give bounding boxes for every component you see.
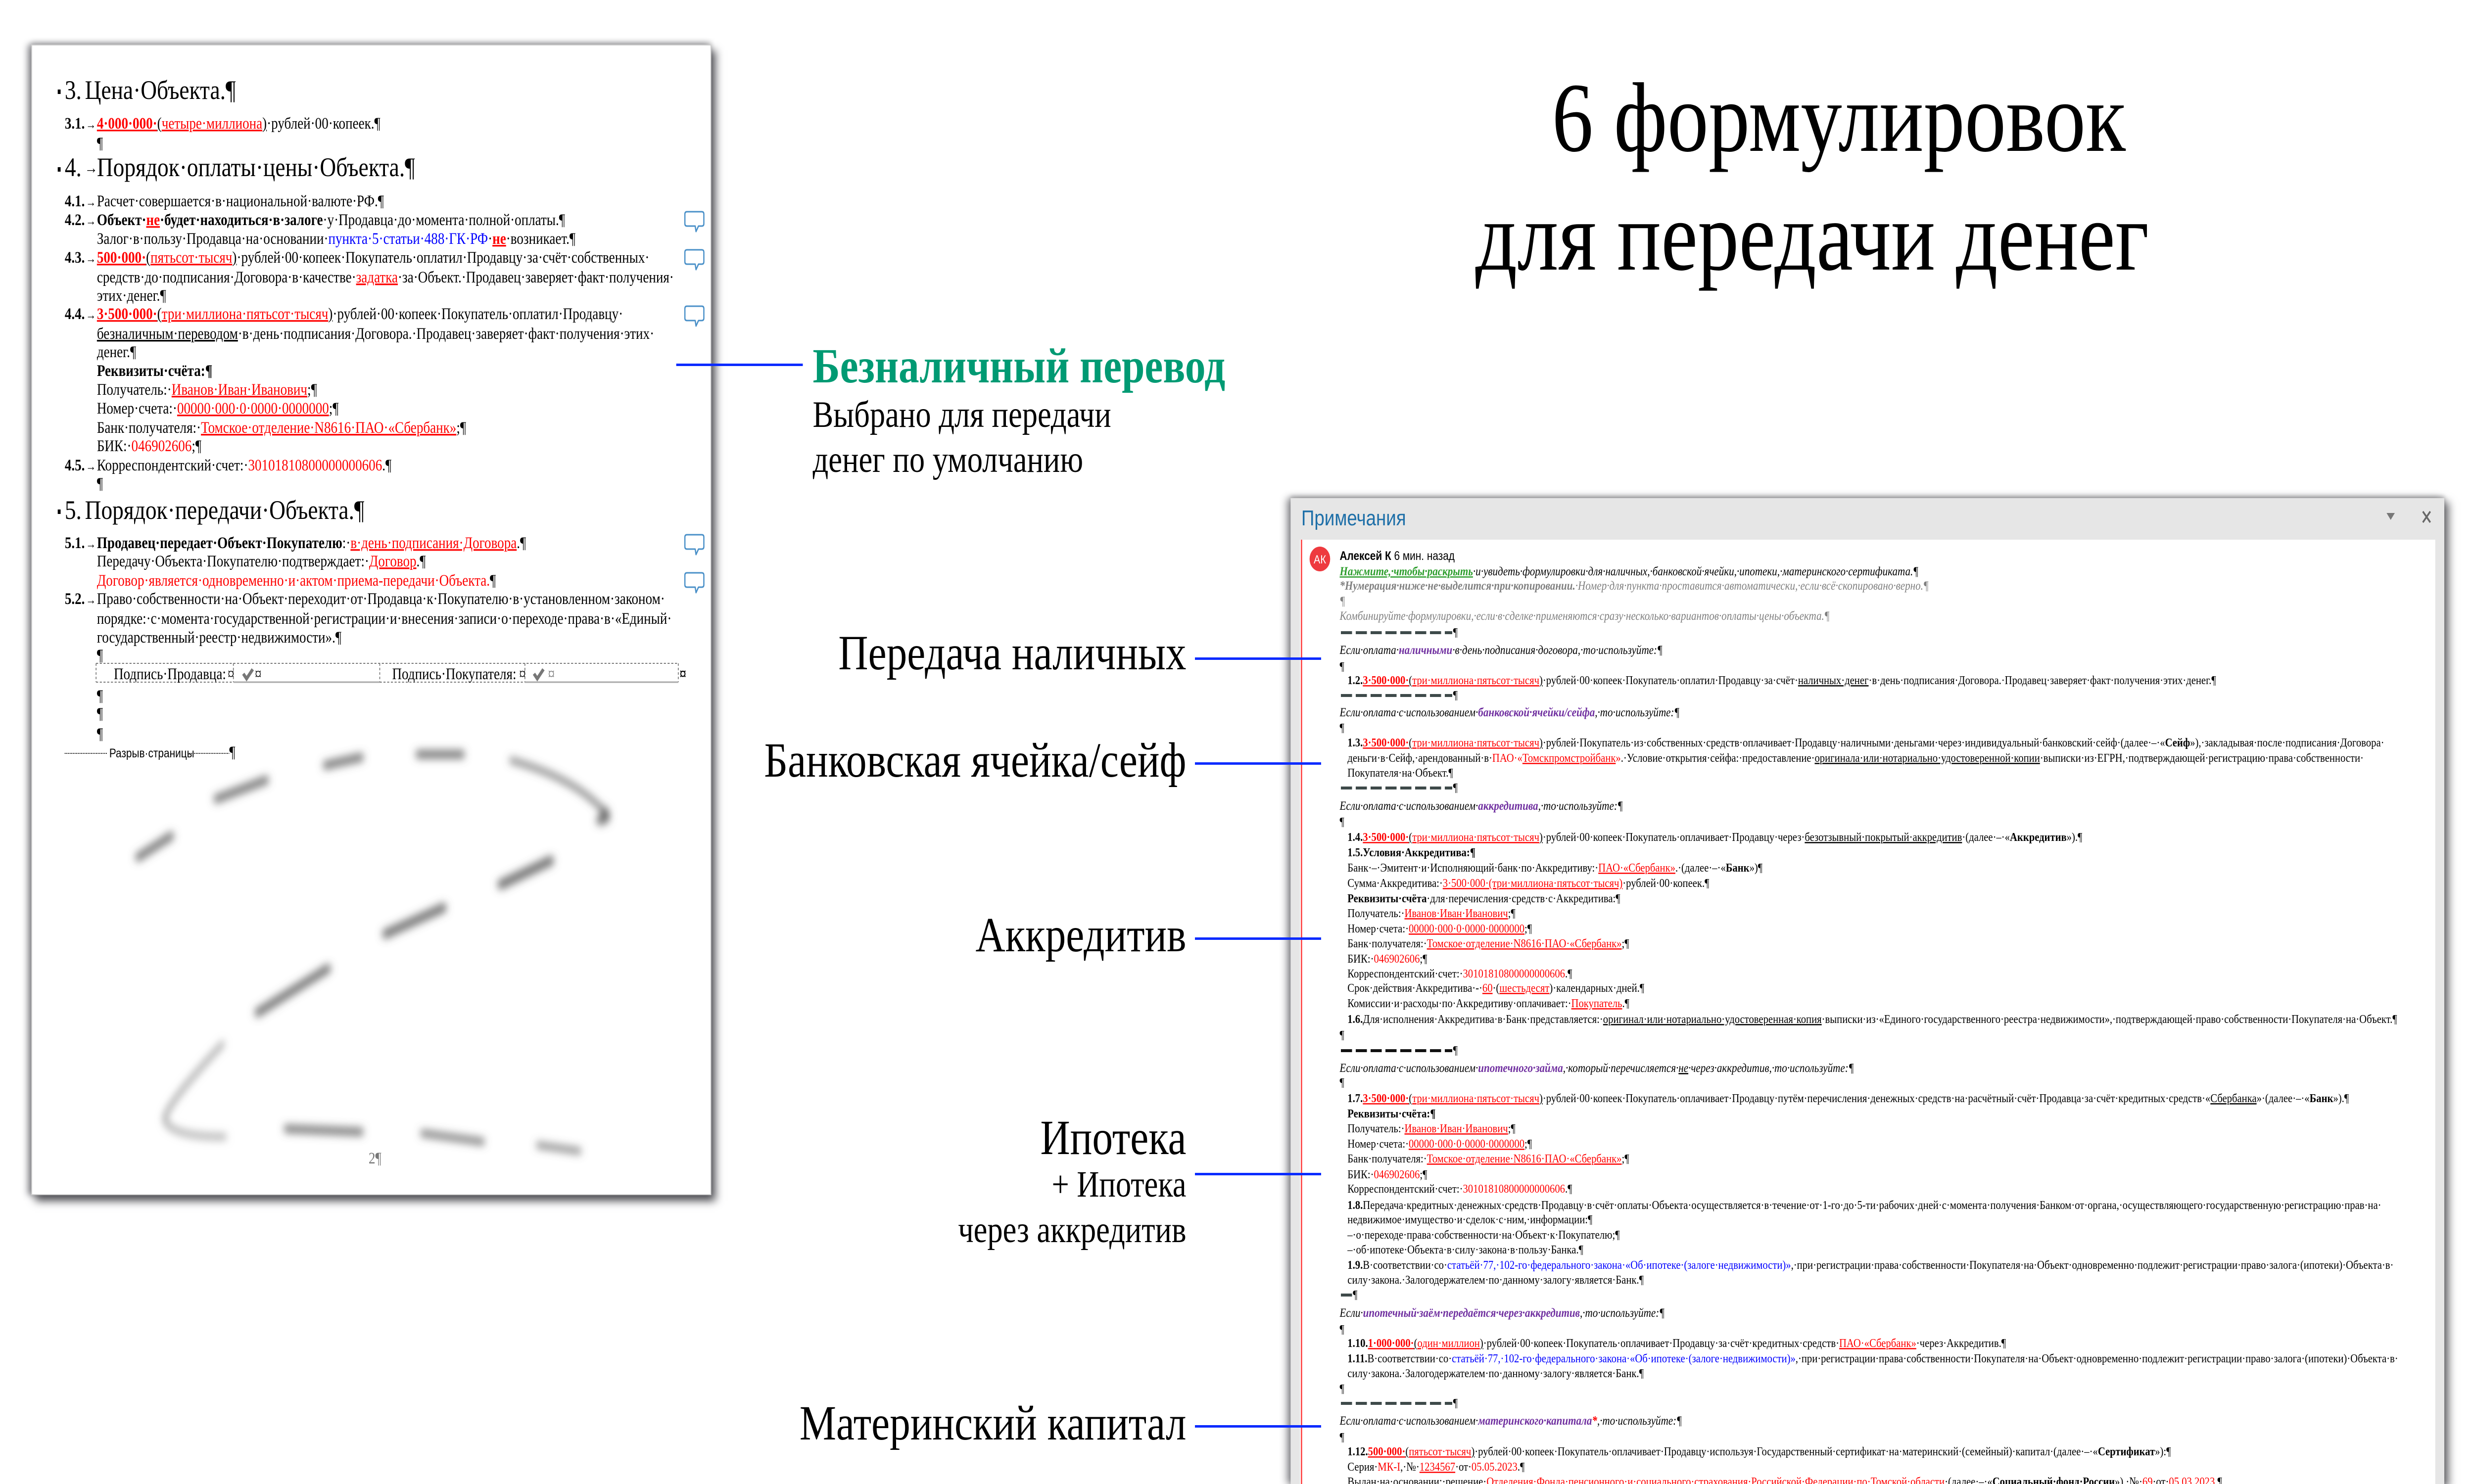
labels: payment methods: Ипотека [1041, 1110, 1186, 1165]
heading: notes title: Примечания [1301, 506, 1406, 530]
text: bank safe clause: Покупателя·на·Объект.¶ [1347, 766, 1453, 779]
text: clauses 4.1 to 4.5: Объект·не·будет·находиться·в·залоге·у·Продавца·до·момента·полной·оплаты.¶ [97, 211, 565, 229]
callout: non-cash transfer [812, 338, 1225, 480]
labels: payment methods: Материнский капитал [800, 1395, 1186, 1450]
labels: payment methods: через аккредитив [958, 1209, 1186, 1250]
text: clause 3.1: 4·000·000·(четыре·миллиона)·рублей·00·копеек.¶ [97, 115, 381, 133]
arrow: line to non-cash clause [676, 364, 803, 366]
text: letter of credit clause [1339, 799, 2397, 1041]
title: для передачи денег [1475, 182, 2149, 291]
icon: avatar: АК [1314, 553, 1326, 566]
text: maternity capital clause [1339, 1414, 2222, 1484]
text: mortgage clause: –·об·ипотеке·Объекта·в·силу·закона·в·пользу·Банка.¶ [1347, 1243, 1584, 1256]
text: clauses 4.1 to 4.5: 3·500·000·(три·миллиона·пятьсот·тысяч)·рублей·00·копеек·Покупатель·оплатил·Продавцу· [97, 305, 623, 323]
text: bank safe clause: деньги·в·Сейф,·арендованный·в·ПАО·«Томскпромстройбанк».·Условие·открытия·сейфа:·предоставление·оригинала·или·нотариально·удостоверенной·копии·выписки·из·ЕГРН,·подтверждающей·регистрацию·права·собственности· [1347, 751, 2364, 764]
text: mortgage via letter of credit clause: силу·закона.·Залогодержателем·по·данному·залогу·является·Банк.¶ [1347, 1366, 1644, 1380]
arrow: line to safe clause [1195, 762, 1321, 765]
text: bank safe clause: ¶ [1339, 721, 1344, 734]
text: letter of credit clause: Корреспондентский·счет:·30101810800000000606.¶ [1347, 967, 1572, 980]
text: clauses 4.1 to 4.5: Залог·в·пользу·Продавца·на·основании·пункта·5·статьи·488·ГК·РФ·не·возникает.¶ [97, 230, 576, 248]
text: mortgage via letter of credit clause: ¶ [1339, 1322, 1344, 1336]
text: clauses 4.1 to 4.5: денег.¶ [97, 343, 137, 361]
callout: non-cash transfer: Безналичный перевод [812, 338, 1225, 393]
text: clauses 4.1 to 4.5: → [86, 195, 96, 209]
text: clause 3.1 [65, 115, 381, 152]
heading: section 4: 4. [65, 152, 82, 182]
text: letter of credit clause: Реквизиты·счёта·для·перечисления·средств·с·Аккредитива:¶ [1347, 891, 1620, 905]
text: mortgage clause [1339, 1061, 2393, 1286]
text: letter of credit clause: 1.6.Для·исполнения·Аккредитива·в·Банк·представляется:·оригинал·или·нотариально·удостоверенная·копия·выписки·из·«Единого·государственного·реестра·недвижимости»,·подтверждающей·право·собственности·Покупателя·на·Объект.¶ [1347, 1012, 2397, 1025]
text: letter of credit clause: Банк·–·Эмитент·и·Исполняющий·банк·по·Аккредитиву:·ПАО·«Сбербанк».·(далее·–·«Банк»)¶ [1347, 861, 1763, 874]
text: clauses 4.1 to 4.5: ¶ [97, 475, 103, 493]
text: mortgage clause: ¶ [1339, 1075, 1344, 1089]
icon: avatar [1310, 547, 1330, 571]
text: clauses 4.1 to 4.5 [65, 192, 674, 493]
text: clauses 5.1 and 5.2: Передачу·Объекта·Покупателю·подтверждает:·Договор.¶ [97, 553, 426, 570]
text: mortgage clause: Номер·счета:·00000·000·0·0000·0000000;¶ [1347, 1137, 1532, 1150]
text: letter of credit clause: ¶ [1339, 1028, 1344, 1041]
heading: section 5: 5. [65, 495, 82, 525]
text: mortgage clause: Получатель:·Иванов·Иван·Иванович;¶ [1347, 1121, 1516, 1135]
heading: section 4: Порядок·оплаты·цены·Объекта.¶ [97, 152, 415, 182]
text: mortgage clause: Корреспондентский·счет:·30101810800000000606.¶ [1347, 1182, 1572, 1195]
panel: notes [1290, 498, 2444, 1484]
text: clauses 4.1 to 4.5: Получатель:·Иванов·Иван·Иванович;¶ [97, 381, 317, 399]
text: clauses 4.1 to 4.5: этих·денег.¶ [97, 287, 166, 305]
text: clauses 5.1 and 5.2: → [86, 537, 96, 551]
icon: window controls [2386, 511, 2430, 522]
arrow: line to maternity capital clause [1195, 1425, 1321, 1428]
text: clauses 4.1 to 4.5: Реквизиты·счёта:¶ [97, 362, 212, 380]
text: clause 3.1: → [86, 117, 96, 131]
text: letter of credit clause: Если·оплата·с·использованием·аккредитива,·то·используйте:¶ [1339, 799, 1623, 813]
text: empty paragraph marks: ¶ [97, 725, 103, 743]
text: bank safe clause [1339, 705, 2384, 779]
text: clause 3.1: ¶ [97, 135, 103, 152]
text: clauses 5.1 and 5.2: → [86, 593, 96, 606]
text: mortgage clause: Банк·получателя:·Томское·отделение·N8616·ПАО·«Сбербанк»;¶ [1347, 1152, 1629, 1165]
text: mortgage via letter of credit clause: ¶ [1339, 1382, 1344, 1395]
text: letter of credit clause: Банк·получателя:·Томское·отделение·N8616·ПАО·«Сбербанк»;¶ [1347, 936, 1629, 950]
text: mortgage clause: БИК:·046902606;¶ [1347, 1167, 1427, 1181]
table: signatures: ¤ [548, 665, 555, 683]
text: clauses 5.1 and 5.2 [65, 534, 671, 664]
text: mortgage via letter of credit clause: 1.10.1·000·000·(один·миллион)·рублей·00·копеек·Покупатель·оплачивает·Продавцу·за·счёт·кредитных·средств·ПАО·«Сбербанк»·через·Аккредитив.¶ [1347, 1336, 2006, 1349]
text: dash divider: ¶ [1453, 1043, 1458, 1057]
text: maternity capital clause: 1.12.500·000·(пятьсот·тысяч)·рублей·00·копеек·Покупатель·оплачивает·Продавцу·используя·Государственный·сертификат·на·материнский·(семейный)·капитал·(далее·–·«Сертификат»):¶ [1347, 1444, 2171, 1458]
text: clauses 4.1 to 4.5: 500·000·(пятьсот·тысяч)·рублей·00·копеек·Покупатель·оплатил·Продавцу·за·счёт·собственных· [97, 249, 649, 267]
text: letter of credit clause: ¶ [1339, 815, 1344, 828]
text: maternity capital clause: ¶ [1339, 1430, 1344, 1443]
text: bank safe clause: Если·оплата·с·использованием·банковской·ячейки/сейфа,·то·используйте:¶ [1339, 705, 1680, 720]
text: clauses 4.1 to 4.5: → [86, 214, 96, 228]
text: short dash [1341, 1288, 1358, 1301]
heading: section 4: → [85, 160, 97, 177]
callout: non-cash transfer: Выбрано для передачи [812, 394, 1111, 435]
text: mortgage clause: Если·оплата·с·использованием·ипотечного·займа,·который·перечисляется·не·через·аккредитив,·то·используйте:¶ [1339, 1061, 1854, 1075]
text: clauses 4.1 to 4.5: → [86, 251, 96, 265]
text: clauses 4.1 to 4.5: → [86, 459, 96, 473]
text: clauses 4.1 to 4.5: 4.5. [65, 457, 85, 474]
text: clauses 5.1 and 5.2: 5.1. [65, 534, 85, 552]
callout: non-cash transfer: денег по умолчанию [812, 439, 1083, 480]
text: mortgage via letter of credit clause: 1.11.В·соответствии·со·статьёй·77,·102-го·федерального·закона·«Об·ипотеке·(залоге·недвижимости)»,·при·регистрации·права·собственности·Покупателя·на·Объект·одновременно·подлежит·регистрации·право·залога·(ипотеки)·Объекта·в· [1347, 1351, 2398, 1365]
text: clauses 4.1 to 4.5: 4.3. [65, 249, 85, 267]
text: clauses 4.1 to 4.5: 4.2. [65, 211, 85, 229]
text: letter of credit clause: Получатель:·Иванов·Иван·Иванович;¶ [1347, 906, 1516, 920]
text: comment intro: *Нумерация·ниже·не·выделится·при·копировании.·Номер·для·пункта·проставится·автоматически,·если·всё·скопировано·верно.¶ [1339, 579, 1929, 593]
text: clauses 5.1 and 5.2: государственный·реестр·недвижимости».¶ [97, 629, 342, 647]
table: signatures [96, 663, 686, 683]
text: comment intro: Нажмите,·чтобы·раскрыть·и·увидеть·формулировки·для·наличных,·банковской·ячейки,·ипотеки,·материнского·сертификата.¶ [1339, 564, 1918, 579]
text: clauses 4.1 to 4.5: Корреспондентский·счет:·30101810800000000606.¶ [97, 457, 392, 474]
text: clauses 5.1 and 5.2: Договор·является·одновременно·и·актом·приема-передачи·Объекта.¶ [97, 572, 496, 590]
arrow: line to letter of credit clause [1195, 937, 1321, 940]
text: mortgage via letter of credit clause [1339, 1306, 2398, 1395]
text: letter of credit clause: 1.4.3·500·000·(три·миллиона·пятьсот·тысяч)·рублей·00·копеек·Покупатель·оплачивает·Продавцу·через·безотзывный·покрытый·аккредитив·(далее·–·«Аккредитив»).¶ [1347, 830, 2083, 843]
text: letter of credit clause: БИК:·046902606;¶ [1347, 952, 1427, 965]
text: clause 3.1: 3.1. [65, 115, 85, 133]
arrow: line to mortgage clause [1195, 1173, 1321, 1175]
table: signatures: ¤ [519, 665, 526, 683]
text: clauses 4.1 to 4.5: Банк·получателя:·Томское·отделение·N8616·ПАО·«Сбербанк»;¶ [97, 419, 467, 437]
table: signatures: Подпись·Продавца: [114, 665, 226, 683]
title [1475, 63, 2149, 291]
text: mortgage clause: недвижимое·имущество·и·сделок·с·ним,·информации:¶ [1347, 1212, 1593, 1226]
text: letter of credit clause: 1.5.Условия·Аккредитива:¶ [1347, 845, 1475, 859]
text: maternity capital clause: Серия·МК-I,·№·1234567·от·05.05.2023.¶ [1347, 1460, 1525, 1473]
text: clauses 4.1 to 4.5: Расчет·совершается·в·национальной·валюте·РФ.¶ [97, 192, 384, 210]
arrow: line to cash clause [1195, 657, 1321, 660]
labels: payment methods: Аккредитив [975, 907, 1186, 962]
text: clauses 4.1 to 4.5: Номер·счета:·00000·000·0·0000·0000000;¶ [97, 400, 339, 417]
table: signatures: Подпись·Покупателя: [392, 665, 516, 683]
text: mortgage clause: 1.9.В·соответствии·со·статьёй·77,·102-го·федерального·закона·«Об·ипотеке·(залоге·недвижимости)»,·при·регистрации·права·собственности·Покупателя·на·Объект·одновременно·подлежит·регистрации·право·залога·(ипотеки)·Объекта·в· [1347, 1258, 2393, 1271]
text: comment intro [1339, 564, 1929, 623]
text: dash divider: ¶ [1453, 688, 1458, 701]
text: cash clause [1339, 643, 2216, 687]
text: empty paragraph marks: ¶ [97, 705, 103, 723]
text: page break [65, 743, 236, 761]
text: clauses 4.1 to 4.5: 4.4. [65, 305, 85, 323]
icon: blurred scribble stroke [138, 754, 607, 1151]
text: mortgage clause: силу·закона.·Залогодержателем·по·данному·залогу·является·Банк.¶ [1347, 1273, 1644, 1286]
text: comment intro: ¶ [1339, 594, 1345, 608]
heading: section 3: 3. [65, 75, 82, 105]
text: clauses 5.1 and 5.2: Продавец·передает·Объект·Покупателю:·в·день·подписания·Договора.¶ [97, 534, 526, 552]
text: cash clause: 1.2.3·500·000·(три·миллиона·пятьсот·тысяч)·рублей·00·копеек·Покупатель·оплатил·Продавцу·за·счёт·наличных·денег·в·день·подписания·Договора.·Продавец·заверяет·факт·получения·этих·денег.¶ [1347, 673, 2216, 687]
heading: section 3: Цена·Объекта.¶ [85, 75, 236, 105]
text: mortgage clause: Реквизиты·счёта:¶ [1347, 1107, 1435, 1120]
heading: section 5: Порядок·передачи·Объекта.¶ [85, 495, 365, 525]
text: empty paragraph marks: ¶ [97, 687, 103, 705]
table: signatures: ¤ [228, 665, 235, 683]
text: clauses 4.1 to 4.5: БИК:·046902606;¶ [97, 437, 202, 455]
table: signatures: ¤ [679, 665, 686, 683]
text: page number: 2¶ [369, 1150, 381, 1167]
title: 6 формулировок [1552, 63, 2126, 172]
text: letter of credit clause: Комиссии·и·расходы·по·Аккредитиву·оплачивает:·Покупатель.¶ [1347, 996, 1630, 1010]
text: page break: ¶ [229, 743, 236, 761]
text: maternity capital clause: Если·оплата·с·использованием·материнского·капитала*,·то·используйте:¶ [1339, 1414, 1682, 1428]
text: clauses 4.1 to 4.5: 4.1. [65, 192, 85, 210]
text: clauses 4.1 to 4.5: средств·до·подписания·Договора·в·качестве·задатка·за·Объект.·Продавец·заверяет·факт·получения· [97, 269, 674, 286]
text: clauses 5.1 and 5.2: порядке:·с·момента·государственной·регистрации·и·внесения·записи·о·переходе·права·в·«Единый· [97, 610, 671, 628]
panel: contract page [31, 45, 711, 1195]
text: clauses 4.1 to 4.5: → [86, 308, 96, 322]
text: clauses 5.1 and 5.2: 5.2. [65, 590, 85, 608]
text: cash clause: ¶ [1339, 659, 1344, 673]
text: bank safe clause: 1.3.3·500·000·(три·миллиона·пятьсот·тысяч)·рублей·Покупатель·из·собственных·средств·оплачивает·Продавцу·наличными·деньгами·через·индивидуальный·банковский·сейф·(далее·–·«Сейф»),·закладывая·после·подписания·Договора· [1347, 736, 2384, 749]
text: short dash: ¶ [1353, 1288, 1358, 1301]
text: mortgage clause: 1.7.3·500·000·(три·миллиона·пятьсот·тысяч)·рублей·00·копеек·Покупатель·оплачивает·Продавцу·путём·перечисления·денежных·средств·на·расчётный·счёт·Продавца·за·счёт·кредитных·средств·«Сбербанка»·(далее·–·«Банк»).¶ [1347, 1091, 2349, 1105]
text: letter of credit clause: Срок·действия·Аккредитива·-·60·(шестьдесят)·календарных·дней.¶ [1347, 981, 1645, 994]
table: signatures: ¤ [255, 665, 262, 683]
text: clauses 5.1 and 5.2: Право·собственности·на·Объект·переходит·от·Продавца·к·Покупателю·в·установленном·законом· [97, 590, 665, 608]
text: empty paragraph marks [97, 687, 103, 743]
labels: payment methods: + Ипотека [1051, 1163, 1186, 1205]
labels: payment methods: Банковская ячейка/сейф [764, 733, 1186, 788]
text: comment intro: Комбинируйте·формулировки,·если·в·сделке·применяются·сразу·несколько·вариантов·оплаты·цены·объекта.¶ [1339, 609, 1830, 623]
text: dash divider: ¶ [1453, 1396, 1458, 1409]
text: clauses 4.1 to 4.5: безналичным·переводом·в·день·подписания·Договора.·Продавец·заверяет·факт·получения·этих· [97, 325, 654, 343]
text: mortgage via letter of credit clause: Если·ипотечный·заём·передаётся·через·аккредитив,·то·используйте:¶ [1339, 1306, 1665, 1320]
text: dash divider: ¶ [1453, 781, 1458, 794]
text: mortgage clause: 1.8.Передача·кредитных·денежных·средств·Продавцу·в·счёт·оплаты·Объекта·осуществляется·в·течение·от·1-го·до·5-ти·рабочих·дней·с·момента·получения·Банком·от·органа,·осуществляющего·государственную·регистрацию·прав·на· [1347, 1198, 2381, 1211]
text: letter of credit clause: Сумма·Аккредитива:·3·500·000·(три·миллиона·пятьсот·тысяч)·рублей·00·копеек.¶ [1347, 876, 1710, 889]
labels: payment methods: Передача наличных [838, 625, 1186, 680]
text: clauses 5.1 and 5.2: ¶ [97, 647, 103, 664]
text: dash divider: ¶ [1453, 625, 1458, 639]
text: comment author: Алексей К 6 мин. назад [1339, 549, 1455, 562]
text: cash clause: Если·оплата·наличными·в·день·подписания·договора,·то·используйте:¶ [1339, 643, 1663, 657]
text: page break: Разрыв·страницы [109, 746, 194, 760]
text: letter of credit clause: Номер·счета:·00000·000·0·0000·0000000;¶ [1347, 922, 1532, 935]
text: mortgage clause: –·о·переходе·права·собственности·на·Объект·к·Покупателю;¶ [1347, 1228, 1620, 1241]
